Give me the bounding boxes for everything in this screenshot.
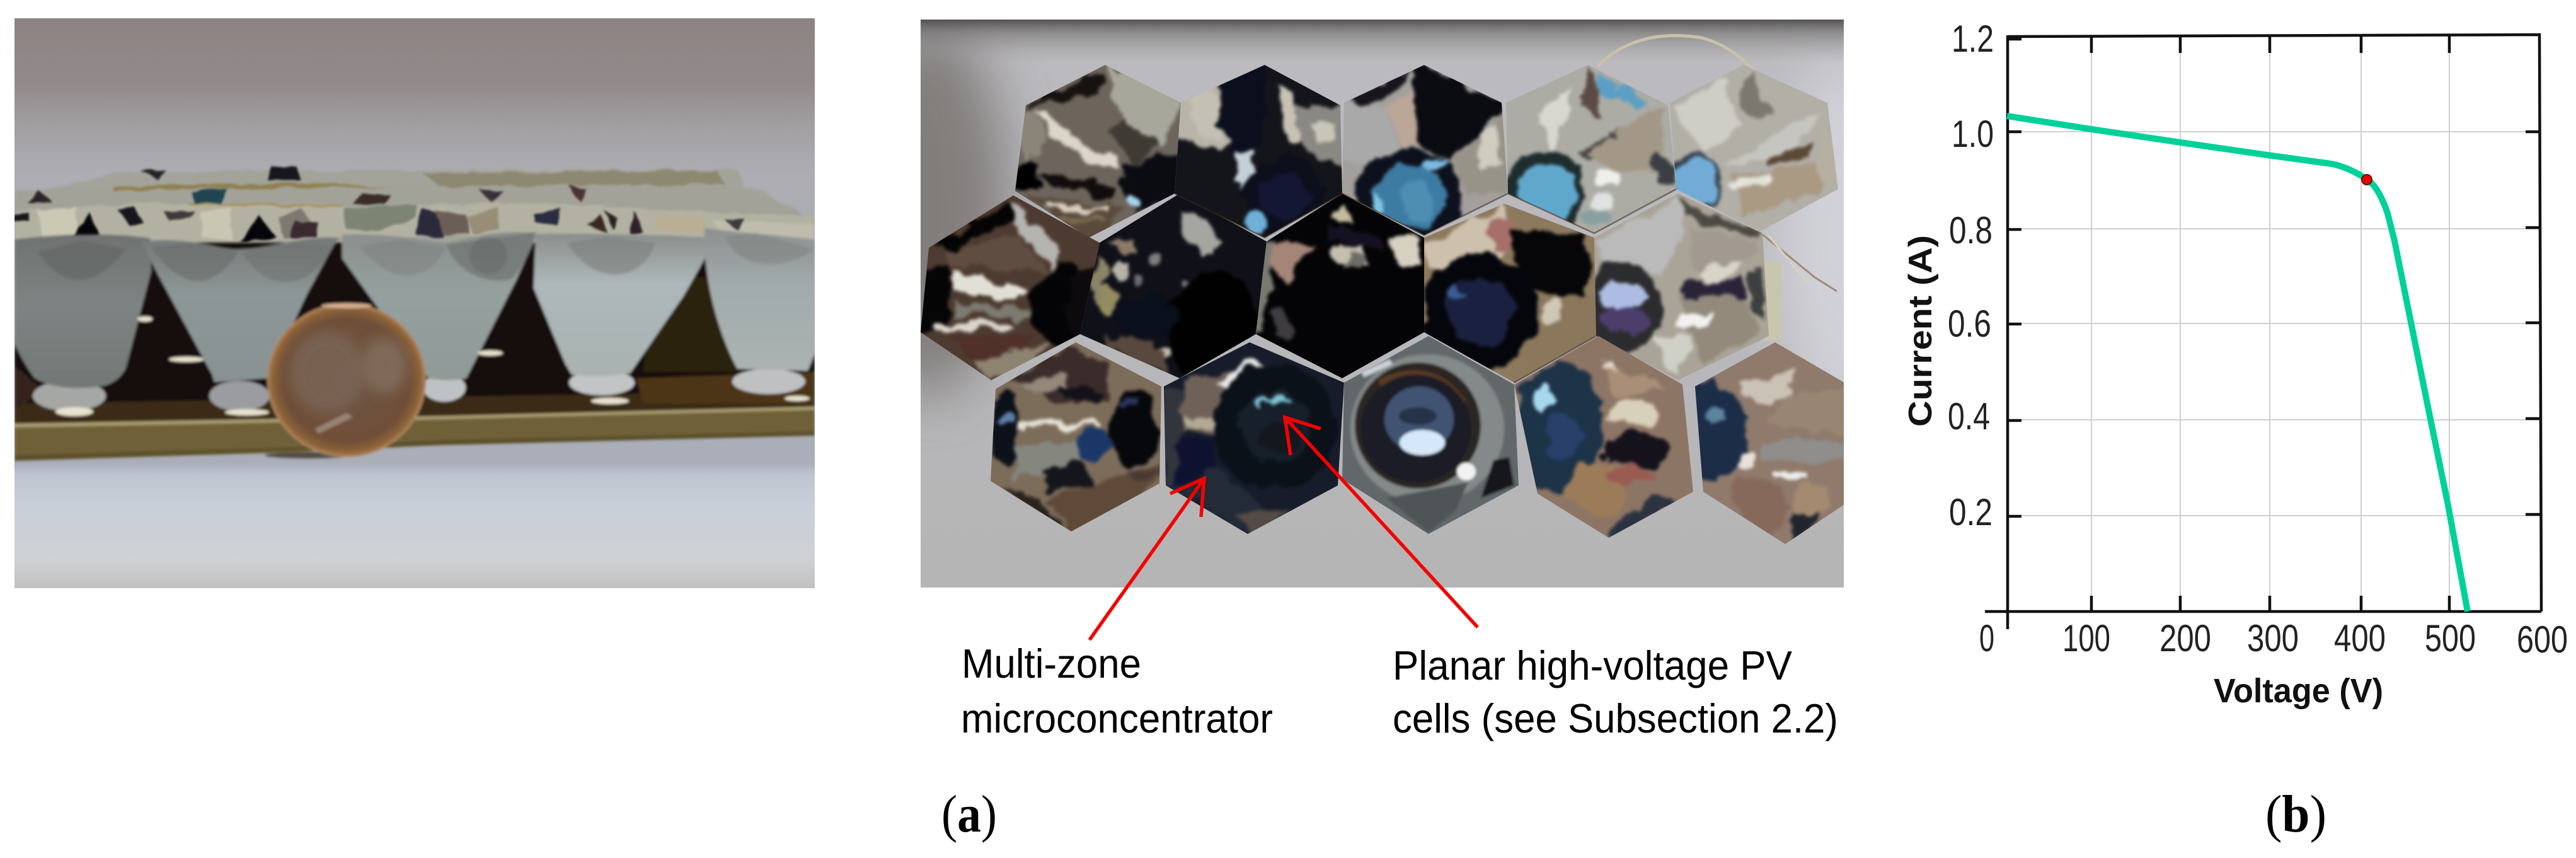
one-euro coin <box>267 303 426 457</box>
x axis tick labels: 300 <box>2247 617 2299 659</box>
plot frame and axes <box>1985 35 2541 629</box>
maximum power point <box>2362 175 2372 185</box>
handwritten numerals shadow <box>469 236 507 274</box>
photo: top view of hexagonal mirror array <box>921 20 1844 588</box>
photo: side view of microconcentrator array with coin <box>14 18 815 588</box>
mirror row 1 <box>1015 65 1838 238</box>
front row mirrored rims <box>14 202 815 243</box>
text label: planar high-voltage PV cells: Planar high-voltage PV <box>1393 642 1793 688</box>
x axis tick labels <box>1979 617 2568 661</box>
text label: multi-zone microconcentrator <box>961 641 1273 741</box>
x axis tick labels: 0 <box>1979 617 1994 659</box>
mirror row 3 <box>991 336 1844 544</box>
y axis title: Current (A) <box>1902 235 1939 427</box>
cone bases <box>33 369 805 411</box>
caption (b): (b) <box>2265 785 2326 844</box>
x axis tick labels: 500 <box>2425 617 2476 659</box>
arrow: multi-zone microconcentrator pointer <box>1090 478 1204 640</box>
brass tray <box>14 407 815 461</box>
chart: current-voltage curve <box>1902 18 2568 710</box>
brass seams between mirrors <box>1175 189 1676 383</box>
y axis tick labels: 0.2 <box>1949 491 1992 533</box>
text label: multi-zone microconcentrator: Multi-zone <box>962 641 1141 687</box>
text label: multi-zone microconcentrator: microconcentrator <box>961 695 1273 741</box>
y axis tick labels: 1.2 <box>1952 18 1994 60</box>
gridlines <box>2008 35 2540 612</box>
dark shadow and tray underside <box>14 241 815 405</box>
tray shadow <box>265 452 353 458</box>
caption (a): (a) <box>941 785 997 844</box>
y axis tick labels: 1.0 <box>1952 113 1994 155</box>
small bright reflections <box>55 316 810 416</box>
grey cones <box>14 228 815 388</box>
y axis tick labels: 0.4 <box>1948 395 1990 438</box>
text label: planar high-voltage PV cells <box>1393 642 1838 741</box>
I-V curve line <box>2007 116 2468 612</box>
wires and backing strip <box>1597 35 1837 340</box>
x axis tick labels: 200 <box>2159 617 2211 659</box>
x axis tick labels: 100 <box>2062 617 2110 659</box>
y axis tick labels: 0.8 <box>1949 209 1992 252</box>
y axis tick labels <box>1948 18 1994 533</box>
y axis tick labels: 0.6 <box>1948 303 1991 345</box>
x axis title: Voltage (V) <box>2214 672 2383 710</box>
text label: planar high-voltage PV cells: cells (see Subsection 2.2) <box>1393 695 1838 741</box>
back row of concentrator rims <box>14 166 815 252</box>
mirror row 2 <box>921 194 1769 383</box>
x axis tick labels: 400 <box>2334 617 2386 659</box>
arrow: planar PV cells pointer <box>1285 417 1478 627</box>
